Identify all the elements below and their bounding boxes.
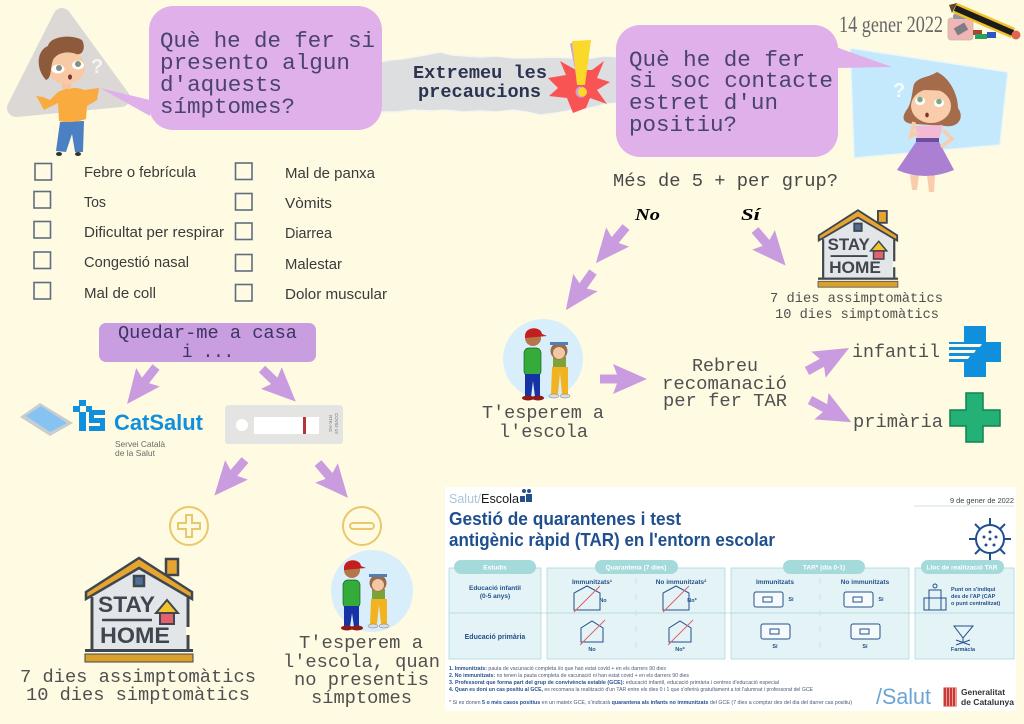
box: stay at home bbox=[99, 322, 316, 363]
text: isolation days (right): 10 dies simptomàtics bbox=[775, 308, 939, 323]
logo: Generalitat de Catalunya: de Catalunya bbox=[961, 698, 1015, 707]
icon: stay home house (left): STAY bbox=[98, 592, 155, 617]
question text: positiu? bbox=[629, 112, 737, 138]
illustration: boy with question mark bbox=[16, 17, 121, 156]
illustration: kids at school (right) bbox=[503, 319, 583, 400]
icon: antigen test: COVID-19 bbox=[334, 413, 339, 434]
symptom checklist: left column: Congestió nasal bbox=[84, 255, 189, 271]
quarantine table bbox=[449, 560, 1014, 659]
icon: stay home house (left) bbox=[85, 558, 193, 662]
symptom checklist: right column bbox=[236, 163, 387, 303]
text: receive recommendation bbox=[662, 355, 787, 412]
document title: antigènic ràpid (TAR) en l'entorn escolar bbox=[449, 529, 775, 550]
logo: Generalitat de Catalunya bbox=[943, 687, 1015, 707]
icon: stay home house (right): STAY bbox=[828, 236, 870, 254]
arrow: to primària bbox=[803, 387, 859, 435]
footnotes: 4. Quan es doni un cas positiu al GCE, es recomana la realització d'un TAR entre els dies 0 i 1 que s'oferirà gratuïtament a tot l'alumnat i professorat del GCE bbox=[449, 687, 814, 693]
symptom checklist: right column: Mal de panxa bbox=[285, 166, 376, 182]
symptom checklist: right column: Diarrea bbox=[285, 226, 333, 242]
table text: No bbox=[599, 598, 607, 604]
text: wait at school until no symptoms bbox=[283, 632, 440, 709]
table text: Immunitzats¹ bbox=[572, 579, 612, 586]
quarantine table: o punt centralitzat) bbox=[951, 601, 1000, 607]
illustration: boy with question mark: ? bbox=[91, 56, 103, 78]
box: stay at home: i ... bbox=[182, 341, 234, 363]
arrow: quedar to CatSalut bbox=[115, 358, 168, 413]
label: Sí: Sí bbox=[741, 205, 762, 224]
arrow: No first bbox=[584, 217, 638, 273]
table text: No immunitzats bbox=[841, 579, 890, 586]
document title: Gestió de quarantenes i test bbox=[449, 508, 681, 529]
footnotes: 3. Professorat que forma part del grup de convivència estable (GCE): educació infantil, educació primària i centres d'educació especial bbox=[449, 680, 779, 686]
footnotes bbox=[449, 666, 852, 706]
text: wait at school: T'esperem a bbox=[482, 402, 604, 424]
icon: minus bbox=[343, 507, 381, 545]
text: wait at school: l'escola bbox=[499, 421, 588, 443]
label: No: No bbox=[634, 205, 660, 224]
table header pills: Quarantena (7 dies) bbox=[606, 564, 666, 572]
panel: official quarantine document bbox=[445, 487, 1016, 711]
arrow: No second bbox=[554, 263, 605, 319]
text: receive recommendation: recomanació bbox=[662, 373, 787, 395]
table header pills: TAR* (dia 0-1) bbox=[803, 564, 845, 572]
text: wait at school until no symptoms: no presentis bbox=[294, 669, 429, 691]
logo: Generalitat de Catalunya: Generalitat bbox=[961, 688, 1005, 697]
arrow: quedar to test bbox=[252, 358, 306, 412]
icon: antigen test: RTK-AG bbox=[328, 415, 333, 432]
document title bbox=[449, 508, 775, 550]
question text: Què he de fer bbox=[629, 47, 805, 73]
icon: green pharmacy cross bbox=[950, 393, 1000, 442]
label: infantil: infantil bbox=[852, 341, 940, 363]
logo: CatSalut: Servei Català bbox=[115, 439, 165, 449]
document header bbox=[449, 489, 1014, 506]
question text bbox=[160, 28, 375, 120]
table icon: health centre bbox=[924, 584, 946, 610]
arrow: Sí bbox=[744, 220, 797, 275]
document header: Escola bbox=[481, 491, 520, 506]
text: receive recommendation: Rebreu bbox=[692, 355, 758, 377]
table text: Sí bbox=[772, 644, 778, 650]
table header pills: Estudis bbox=[483, 564, 507, 572]
arrow: test to negative bbox=[307, 453, 359, 508]
table icons: houses crossed out bbox=[574, 586, 693, 645]
banner text: Extremeu les bbox=[413, 62, 547, 84]
illustration: girl thinking: ? bbox=[893, 80, 905, 102]
table text: (0-5 anys) bbox=[480, 593, 510, 600]
banner text: precaucions bbox=[418, 81, 541, 103]
icon: phone bbox=[20, 403, 73, 436]
arrow: test to positive bbox=[203, 450, 256, 505]
speech bubble: contact question bbox=[616, 25, 892, 157]
question text: Què he de fer si bbox=[160, 28, 375, 54]
table text: No bbox=[588, 647, 596, 653]
text: wait at school until no symptoms: símptomes bbox=[311, 687, 412, 709]
symptom checklist: left column: Dificultat per respirar bbox=[84, 225, 224, 241]
logo: CatSalut: de la Salut bbox=[115, 448, 156, 458]
table text: No* bbox=[675, 647, 686, 653]
icon: stay home house (right): HOME bbox=[829, 259, 881, 277]
question text: presento algun bbox=[160, 50, 350, 76]
illustration: girl thinking bbox=[850, 48, 1008, 192]
table text: No* bbox=[687, 598, 698, 604]
question text bbox=[629, 47, 833, 138]
symptom checklist: left column: Febre o febrícula bbox=[84, 165, 197, 181]
text: isolation days (right) bbox=[770, 292, 943, 323]
torn paper banner bbox=[380, 40, 620, 115]
icon: plus bbox=[170, 507, 208, 545]
icon: virus bbox=[969, 518, 1011, 560]
question text: si soc contacte bbox=[629, 68, 833, 94]
table text: No immunitzats² bbox=[656, 579, 707, 586]
text: wait at school until no symptoms: l'escola, quan bbox=[283, 651, 440, 673]
question: more than 5 per group: Més de 5 + per grup? bbox=[613, 170, 838, 192]
table header pills bbox=[454, 560, 1004, 574]
symptom checklist: right column: Vòmits bbox=[285, 196, 332, 212]
logo: /Salut: /Salut bbox=[876, 684, 931, 709]
arrow: to infantil bbox=[800, 335, 856, 384]
logo: CatSalut: CatSalut bbox=[114, 410, 204, 435]
quarantine table: Punt on s'indiqui bbox=[951, 587, 996, 593]
question text: símptomes? bbox=[160, 94, 295, 120]
table text: Immunitzats bbox=[756, 579, 794, 586]
icon: stay home house (left): HOME bbox=[100, 623, 170, 648]
text: wait at school bbox=[482, 402, 604, 443]
table text: Educació primària bbox=[465, 634, 525, 641]
text: wait at school until no symptoms: T'esperem a bbox=[299, 632, 423, 654]
text: isolation days (right): 7 dies assimptomàtics bbox=[770, 292, 943, 307]
table icons: test kits bbox=[754, 592, 880, 639]
table text bbox=[465, 579, 976, 653]
banner text bbox=[413, 62, 547, 103]
table text: Sí bbox=[878, 597, 884, 603]
question text: d'aquests bbox=[160, 72, 282, 98]
label: primària: primària bbox=[853, 411, 943, 433]
symptom checklist: right column: Malestar bbox=[285, 257, 342, 273]
arrow: to recommendation bbox=[600, 364, 647, 394]
table icon: pharmacy cup bbox=[954, 626, 973, 645]
icon: school bag and pencil bbox=[948, 3, 1020, 40]
icon: stay home house (right) bbox=[818, 210, 898, 287]
speech bubble: symptoms question bbox=[100, 6, 382, 130]
logo: CatSalut bbox=[73, 400, 204, 458]
table text: Farmàcia bbox=[951, 647, 976, 653]
table header pills: Lloc de realització TAR bbox=[926, 564, 998, 572]
text: isolation days (left): 7 dies assimptomàtics bbox=[20, 666, 256, 688]
symptom checklist: left column: Mal de coll bbox=[84, 286, 156, 302]
text: isolation days (left) bbox=[20, 666, 256, 706]
document header: Salut/ bbox=[449, 491, 481, 506]
text: receive recommendation: per fer TAR bbox=[663, 390, 787, 412]
footnotes: * Si es donen 5 o més casos positius en un mateix GCE, s'indicarà quarantena als infants no immunitzats del GCE (7 dies a comptar des del dia del darrer cas positiu) bbox=[449, 700, 852, 706]
table text: Sí bbox=[862, 644, 868, 650]
table text: Educació infantil bbox=[469, 585, 521, 592]
date: 14 gener 2022 bbox=[839, 12, 943, 37]
illustration: kids at school (left) bbox=[331, 550, 413, 632]
symptom checklist: right column: Dolor muscular bbox=[285, 287, 387, 303]
symptom checklist: left column: Tos bbox=[84, 195, 106, 211]
footnotes: 1. Immunitzats: pauta de vacunació completa i/o que han estat covid + en els darrers 90 dies bbox=[449, 666, 667, 672]
table text: Sí bbox=[788, 597, 794, 603]
question text: estret d'un bbox=[629, 90, 778, 116]
text: isolation days (left): 10 dies simptomàtics bbox=[26, 684, 250, 706]
box: stay at home: Quedar-me a casa bbox=[118, 322, 297, 344]
icon: warning star with exclamation mark bbox=[548, 40, 610, 113]
symptom checklist: left column bbox=[34, 164, 224, 302]
footnotes: 2. No immunitzats: no tenen la pauta completa de vacunació ni han estat covid + en els darrers 90 dies bbox=[449, 673, 690, 679]
quarantine table: des de l'AP (CAP bbox=[951, 594, 996, 600]
icon: antigen test bbox=[225, 405, 343, 444]
icon: blue health cross bbox=[948, 326, 1001, 377]
document header: 9 de gener de 2022 bbox=[950, 498, 1014, 505]
